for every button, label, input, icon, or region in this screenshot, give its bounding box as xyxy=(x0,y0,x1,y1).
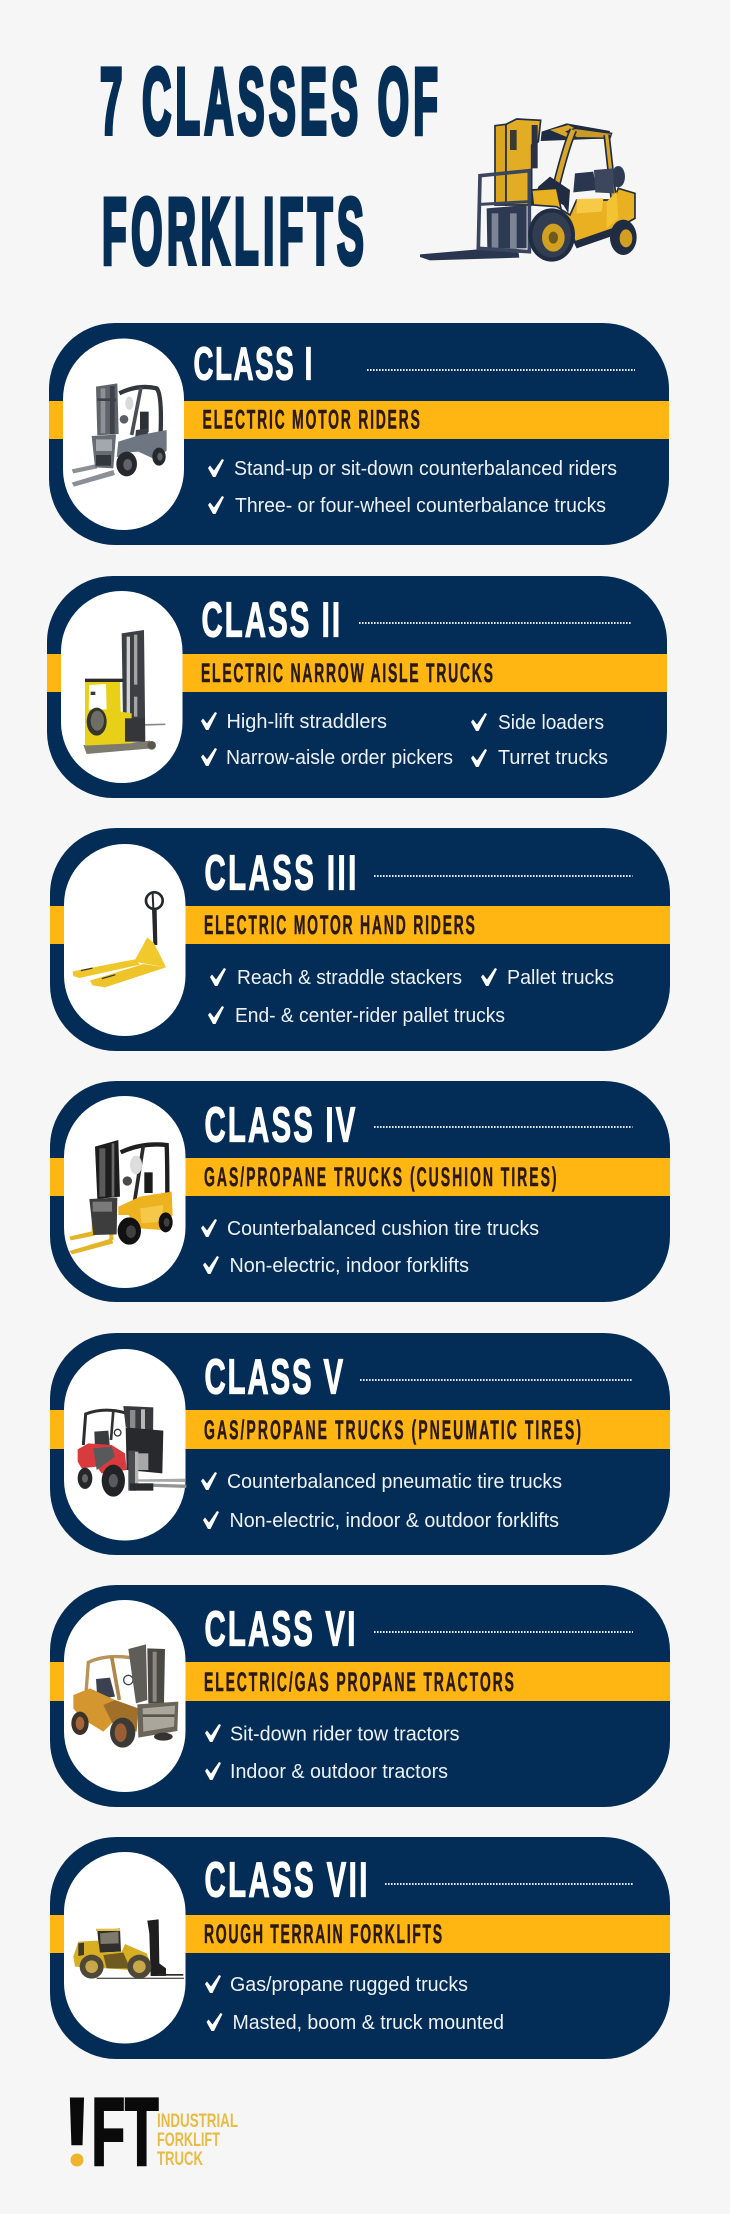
heading: Class III: CLASS III xyxy=(204,845,356,900)
photo frame: Class V xyxy=(64,1349,186,1540)
subtitle: Class VII: ROUGH TERRAIN FORKLIFTS xyxy=(204,1919,442,1949)
heading: Class II: CLASS II xyxy=(202,592,340,647)
bullet: Counterbalanced cushion tire trucks xyxy=(227,1218,539,1240)
subtitle: Class I: ELECTRIC MOTOR RIDERS xyxy=(202,405,420,435)
photo frame: Class VI xyxy=(64,1600,186,1792)
bullet: Narrow-aisle order pickers xyxy=(226,747,453,769)
bullet: Three- or four-wheel counterbalance trucks xyxy=(235,495,606,517)
subtitle: Class V: GAS/PROPANE TRUCKS (PNEUMATIC TIRES) xyxy=(204,1415,581,1445)
bullet: Gas/propane rugged trucks xyxy=(230,1974,468,1996)
photo frame: Class III xyxy=(64,844,186,1036)
bullet: Sit-down rider tow tractors xyxy=(230,1724,460,1746)
bullet: Masted, boom & truck mounted xyxy=(232,2012,504,2034)
bullet: Non-electric, indoor & outdoor forklifts xyxy=(230,1510,559,1532)
title: 7 CLASSES OF xyxy=(100,50,438,154)
band: Class VI xyxy=(50,1662,670,1701)
band: Class IV xyxy=(50,1158,670,1196)
bullet: Turret trucks xyxy=(498,747,608,769)
logo: IFT Industrial Forklift Truck xyxy=(60,2076,238,2187)
subtitle: Class IV: GAS/PROPANE TRUCKS (CUSHION TIRES) xyxy=(204,1162,557,1192)
bullet: Reach & straddle stackers xyxy=(237,967,462,989)
subtitle: Class VI: ELECTRIC/GAS PROPANE TRACTORS xyxy=(204,1667,514,1697)
subtitle: Class III: ELECTRIC MOTOR HAND RIDERS xyxy=(204,910,475,940)
panel: Class V xyxy=(50,1333,670,1555)
photo frame: Class I xyxy=(63,338,184,530)
bullet: Stand-up or sit-down counterbalanced riders xyxy=(234,458,617,480)
panel: Class VI xyxy=(50,1585,670,1807)
panel: Class II xyxy=(47,576,667,798)
bullet: Side loaders xyxy=(498,712,604,734)
icon: black and yellow forklift xyxy=(69,1140,173,1254)
photo frame: Class IV xyxy=(64,1096,186,1288)
heading: Class V: CLASS V xyxy=(204,1349,343,1404)
photo frame: Class VII xyxy=(64,1852,186,2044)
bullet: Counterbalanced pneumatic tire trucks xyxy=(227,1471,562,1493)
heading: Class VII: CLASS VII xyxy=(204,1852,367,1907)
panel: Class IV xyxy=(50,1081,670,1302)
subtitle: Class II: ELECTRIC NARROW AISLE TRUCKS xyxy=(201,658,493,688)
heading: Class IV: CLASS IV xyxy=(204,1097,355,1152)
heading: Class I: CLASS I xyxy=(194,339,312,390)
icon: grey forklift xyxy=(72,383,167,487)
photo frame: Class II xyxy=(61,591,182,783)
logo: IFT Industrial Forklift Truck: FORKLIFT xyxy=(157,2130,220,2151)
band: Class I xyxy=(49,401,669,439)
icon: yellow reach truck xyxy=(83,630,165,754)
panel: Class III xyxy=(50,828,670,1051)
band: Class III xyxy=(50,906,670,944)
icon: rusty orange forklift xyxy=(71,1644,178,1748)
bullet: High-lift straddlers xyxy=(226,711,387,733)
logo: IFT Industrial Forklift Truck: TRUCK xyxy=(157,2149,203,2170)
bullet: Pallet trucks xyxy=(507,967,614,989)
bullet: Non-electric, indoor forklifts xyxy=(230,1255,469,1277)
panel: Class I xyxy=(49,323,669,545)
heading: Class VI: CLASS VI xyxy=(204,1601,355,1656)
band: Class V xyxy=(50,1410,670,1449)
logo: IFT Industrial Forklift Truck: ! xyxy=(60,2076,94,2187)
icon: yellow pallet truck xyxy=(73,892,166,987)
logo: IFT Industrial Forklift Truck: FT xyxy=(92,2078,158,2186)
bullet: End- & center-rider pallet trucks xyxy=(235,1005,505,1027)
bullet: Indoor & outdoor tractors xyxy=(230,1761,448,1783)
title: FORKLIFTS xyxy=(102,180,364,284)
title xyxy=(100,50,438,284)
icon: rough terrain forklift xyxy=(73,1919,184,1979)
icon: red forklift xyxy=(78,1406,186,1497)
icon: hero yellow forklift illustration xyxy=(420,119,637,262)
band: Class II xyxy=(47,654,667,692)
logo: IFT Industrial Forklift Truck: INDUSTRIAL xyxy=(157,2111,238,2132)
band: Class VII xyxy=(50,1915,670,1953)
panel: Class VII xyxy=(50,1837,670,2059)
